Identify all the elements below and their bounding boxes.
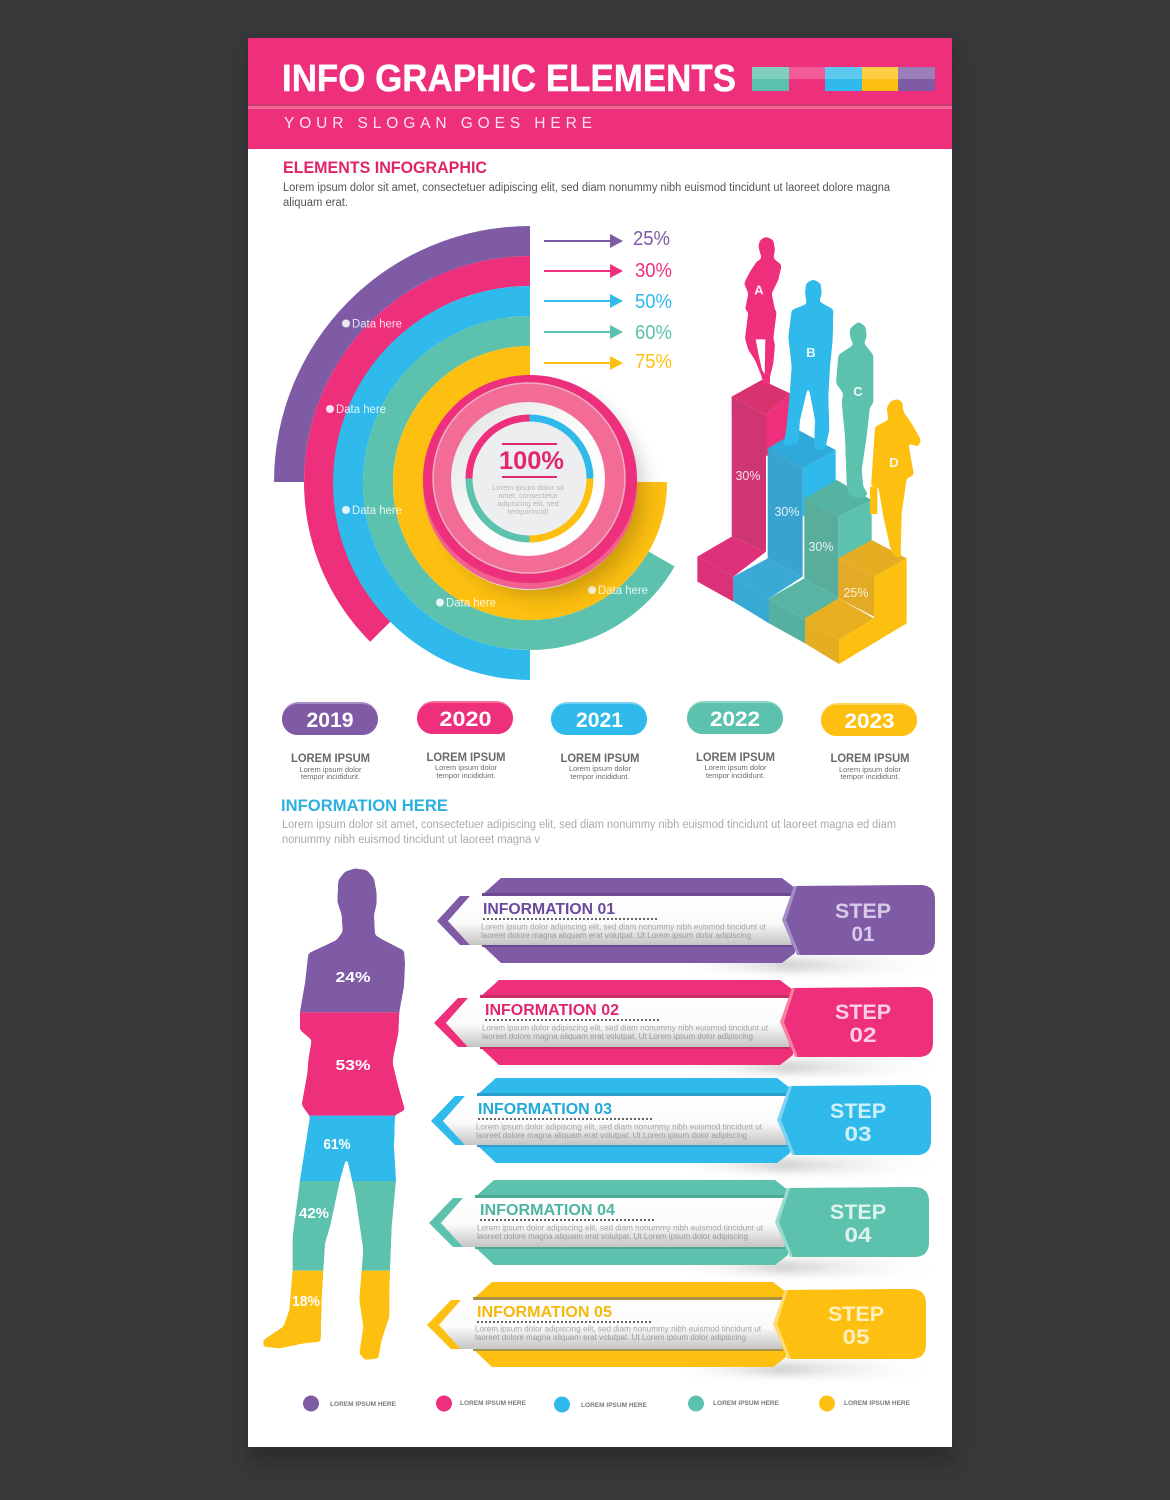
pill: 2023 (821, 703, 917, 736)
step 04 banner (429, 1180, 943, 1276)
man percentages: 53% (336, 1057, 370, 1074)
legend: blue (554, 1396, 648, 1412)
step 05 banner (427, 1282, 941, 1378)
centre text: adipiscing elit, sed (497, 499, 559, 508)
arc: purple (274, 226, 530, 482)
man percentages: 18% (292, 1293, 320, 1310)
data labels (326, 318, 648, 610)
step 02 banner: Lorem ipsum dolor adipiscing elit, sed diam nonummy nibh euismod tincidunt ut (482, 1024, 769, 1032)
pill: 2020 (417, 701, 513, 734)
step 04 banner: STEP (830, 1201, 886, 1224)
legend: pink: LOREM IPSUM HERE (460, 1400, 527, 1407)
step 01 banner: Lorem ipsum dolor adipiscing elit, sed diam nonummy nibh euismod tincidunt ut (481, 922, 767, 932)
step 03 banner: Lorem ipsum dolor adipiscing elit, sed diam nonummy nibh euismod tincidunt ut (476, 1122, 763, 1132)
arrow: 75%: 75% (635, 351, 672, 373)
person letters: A (754, 282, 764, 298)
stair labels: 30% (774, 505, 800, 519)
timeline captions (291, 752, 910, 781)
step 03 banner: INFORMATION 03 (478, 1101, 612, 1118)
data labels: Data here (352, 318, 402, 330)
arc: pink (304, 256, 530, 642)
step 03 banner: laoreet dolore magna aliquam erat volutpat. Ut Lorem ipsum dolor adipiscing (476, 1131, 747, 1140)
arrow: 30%: 30% (635, 260, 672, 282)
legend: teal: LOREM IPSUM HERE (713, 1400, 780, 1407)
step 02 banner: laoreet dolore magna aliquam erat volutpat. Ut Lorem ipsum dolor adipiscing (482, 1032, 753, 1041)
caption: 2020: Lorem ipsum dolor (435, 763, 498, 772)
caption: 2023 (830, 753, 910, 781)
step 01 banner: 01 (852, 923, 875, 946)
caption: 2020: LOREM IPSUM (426, 752, 506, 764)
caption: 2021: LOREM IPSUM (560, 753, 640, 765)
arrow: 50% (544, 291, 672, 313)
man percentages (292, 969, 370, 1310)
intro text: aliquam erat. (283, 197, 348, 209)
arrow legend (544, 228, 672, 373)
step 05 banner: laoreet dolore magna aliquam erat volutpat. Ut Lorem ipsum dolor adipiscing (475, 1333, 746, 1342)
radial arc chart (274, 226, 675, 680)
stair labels (735, 469, 869, 600)
centre text: Lorem ipsum dolor sit (492, 483, 565, 492)
caption: 2023: tempor incididunt. (840, 772, 900, 781)
step 04 banner: laoreet dolore magna aliquam erat volutpat. Ut Lorem ipsum dolor adipiscing (477, 1232, 748, 1241)
step 04 banner: Lorem ipsum dolor adipiscing elit, sed diam nonummy nibh euismod tincidunt ut (477, 1224, 764, 1232)
man percentages: 42% (299, 1205, 329, 1222)
colour swatches (752, 67, 935, 91)
timeline pills (282, 701, 917, 736)
stair labels: 25% (843, 586, 869, 600)
ring segments (469, 418, 590, 539)
step 05 banner: INFORMATION 05 (477, 1304, 612, 1321)
caption: 2021 (560, 753, 640, 781)
person letters (754, 282, 899, 470)
caption: 2019: tempor incididunt. (301, 772, 360, 781)
information text: Lorem ipsum dolor sit amet, consectetuer adipiscing elit, sed diam nonummy nibh euismod tincidunt ut laoreet magna ed diam (282, 819, 896, 831)
heading: information here: INFORMATION HERE (281, 796, 448, 815)
man percentages: 61% (324, 1136, 350, 1153)
teal column (769, 480, 872, 643)
person letters: C (853, 384, 863, 399)
arc: teal (363, 316, 675, 650)
step 01 banner: STEP (835, 900, 891, 923)
yellow column (805, 540, 907, 664)
pill: 2023: 2023 (844, 710, 894, 733)
step 02 banner: STEP (835, 1001, 891, 1024)
caption: 2022 (696, 752, 775, 780)
information text (282, 819, 896, 846)
arc: blue (333, 286, 530, 680)
arrow: 75% (544, 351, 672, 373)
caption: 2022: Lorem ipsum dolor (704, 763, 767, 772)
title: INFO GRAPHIC ELEMENTS (282, 58, 736, 100)
step 02 banner (434, 980, 948, 1076)
isometric stairs with people (697, 237, 921, 664)
legend: purple: LOREM IPSUM HERE (330, 1401, 397, 1408)
page panel (248, 38, 952, 1447)
data labels: Data here (352, 505, 402, 517)
slogan: YOUR SLOGAN GOES HERE (284, 115, 592, 132)
step 03 banner: STEP (830, 1100, 886, 1123)
step 03 banner (431, 1078, 945, 1174)
step 01 banner: laoreet dolore magna aliquam erat volutpat. Ut Lorem ipsum dolor adipiscing (481, 931, 751, 940)
man percentages: 24% (336, 969, 370, 986)
man silhouette chart (263, 868, 405, 1360)
centre disc (423, 375, 644, 596)
legend: teal (688, 1396, 780, 1412)
data labels: Data here (336, 404, 386, 416)
person A (744, 237, 782, 385)
pill: 2022: 2022 (710, 708, 760, 731)
pill: 2019 (282, 702, 378, 735)
centre text (492, 483, 565, 516)
caption: 2019: Lorem ipsum dolor (299, 765, 362, 774)
stair labels: 30% (808, 540, 834, 554)
person C (836, 322, 873, 498)
pill: 2019: 2019 (306, 709, 354, 732)
data labels: Data here (598, 585, 648, 597)
legend: purple (303, 1396, 397, 1412)
step 04 banner: INFORMATION 04 (480, 1202, 615, 1219)
caption: 2019: LOREM IPSUM (291, 753, 370, 765)
arrow: 25%: 25% (633, 228, 670, 250)
stair labels: 30% (735, 469, 761, 483)
step 05 banner: Lorem ipsum dolor adipiscing elit, sed diam nonummy nibh euismod tincidunt ut (475, 1324, 762, 1334)
arrow: 60% (544, 322, 672, 344)
legend: blue: LOREM IPSUM HERE (581, 1402, 648, 1409)
centre text: temporincidi (508, 507, 549, 516)
step 02 banner: INFORMATION 02 (485, 1002, 619, 1019)
caption: 2019 (291, 753, 370, 781)
information text: nonummy nibh euismod tincidunt ut laoreet magna v (282, 834, 540, 846)
caption: 2022: LOREM IPSUM (696, 752, 775, 764)
person letters: B (806, 345, 816, 360)
blue column (733, 430, 836, 623)
pill: 2022 (687, 701, 783, 734)
intro text (283, 182, 891, 209)
pill: 2020: 2020 (440, 708, 492, 731)
caption: 2021: tempor incididunt. (570, 772, 630, 781)
arrow: 30% (544, 260, 672, 282)
bottom legend (303, 1396, 911, 1412)
caption: 2023: Lorem ipsum dolor (839, 765, 902, 774)
person D (870, 399, 921, 558)
caption: 2020 (426, 752, 506, 780)
pink column (697, 380, 790, 602)
step 05 banner: STEP (828, 1303, 884, 1326)
legend: yellow: LOREM IPSUM HERE (844, 1400, 911, 1407)
step 01 banner: INFORMATION 01 (483, 901, 615, 918)
person B (783, 279, 833, 450)
legend: pink (436, 1396, 527, 1412)
step 02 banner: 02 (850, 1024, 876, 1047)
data labels: Data here (446, 598, 496, 610)
person letters: D (889, 455, 899, 470)
step 01 banner (437, 878, 950, 974)
header banner (248, 38, 952, 149)
caption: 2023: LOREM IPSUM (830, 753, 910, 765)
arrow: 60%: 60% (635, 322, 672, 344)
step 04 banner: 04 (844, 1224, 872, 1247)
arrow: 50%: 50% (635, 291, 672, 313)
100% label: 100% (499, 447, 564, 475)
pill: 2021: 2021 (576, 709, 623, 732)
legend: yellow (819, 1396, 911, 1412)
arc: yellow (393, 346, 667, 620)
step 05 banner: 05 (842, 1326, 870, 1349)
intro text: Lorem ipsum dolor sit amet, consectetuer adipiscing elit, sed diam nonummy nibh euismod tincidunt ut laoreet dolore magna (283, 182, 891, 194)
heading: elements infographic: ELEMENTS INFOGRAPHIC (283, 158, 487, 177)
centre text: amet, consectetur (498, 491, 558, 500)
caption: 2022: tempor incididunt. (706, 771, 765, 780)
step 03 banner: 03 (844, 1123, 872, 1146)
arrow: 25% (544, 228, 670, 250)
pill: 2021 (551, 702, 647, 735)
caption: 2020: tempor incididunt. (436, 771, 496, 780)
caption: 2021: Lorem ipsum dolor (569, 764, 632, 773)
